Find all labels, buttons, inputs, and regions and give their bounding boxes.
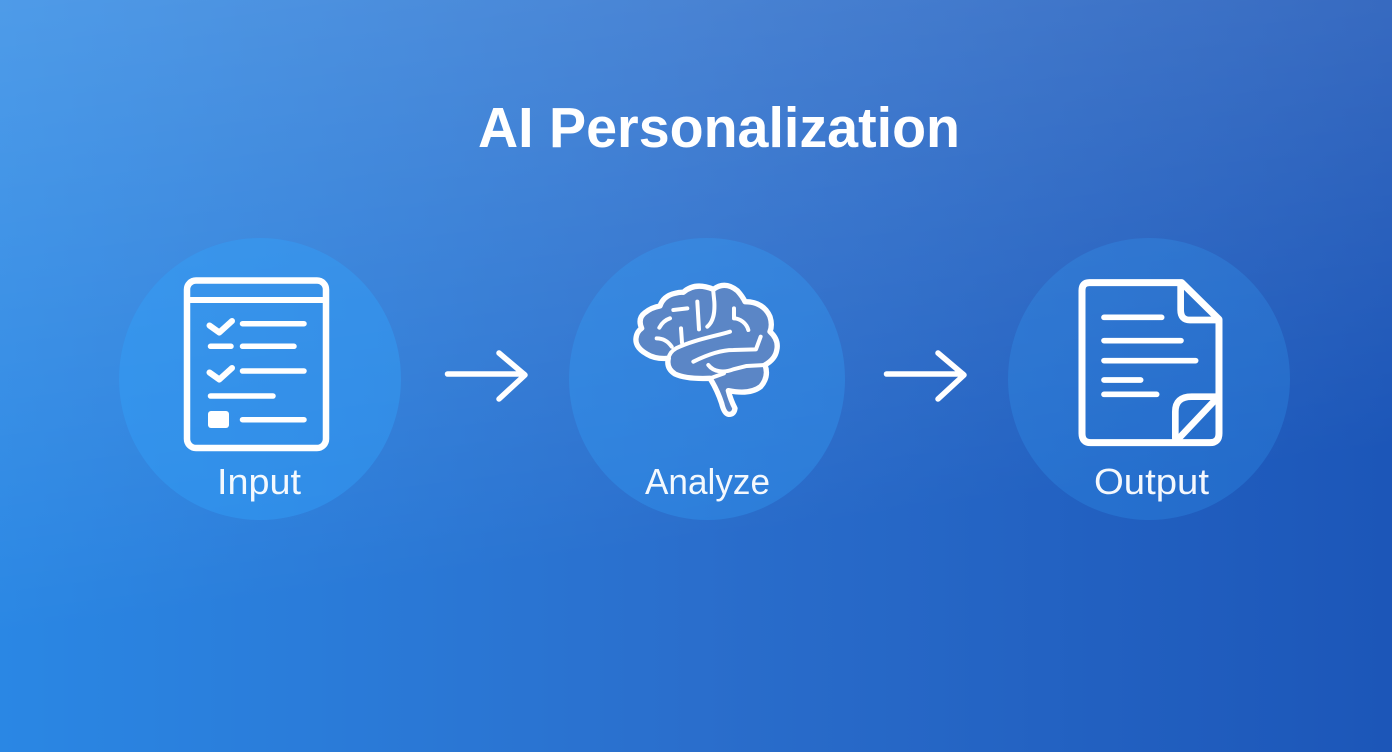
icon: form checklist	[187, 280, 326, 448]
step: output	[1008, 238, 1290, 520]
arrow: input to analyze	[448, 353, 525, 399]
arrow: analyze to output	[886, 353, 964, 399]
step: analyze	[569, 238, 845, 520]
step: input	[119, 238, 401, 520]
label: input: Input	[217, 461, 301, 502]
input circle	[119, 238, 401, 520]
icon: brain	[636, 285, 777, 414]
icon: document	[1082, 283, 1219, 443]
title: AI Personalization	[478, 96, 960, 160]
label: output: Output	[1094, 461, 1209, 502]
analyze circle	[569, 238, 845, 520]
output circle	[1008, 238, 1290, 520]
label: analyze: Analyze	[645, 461, 770, 502]
